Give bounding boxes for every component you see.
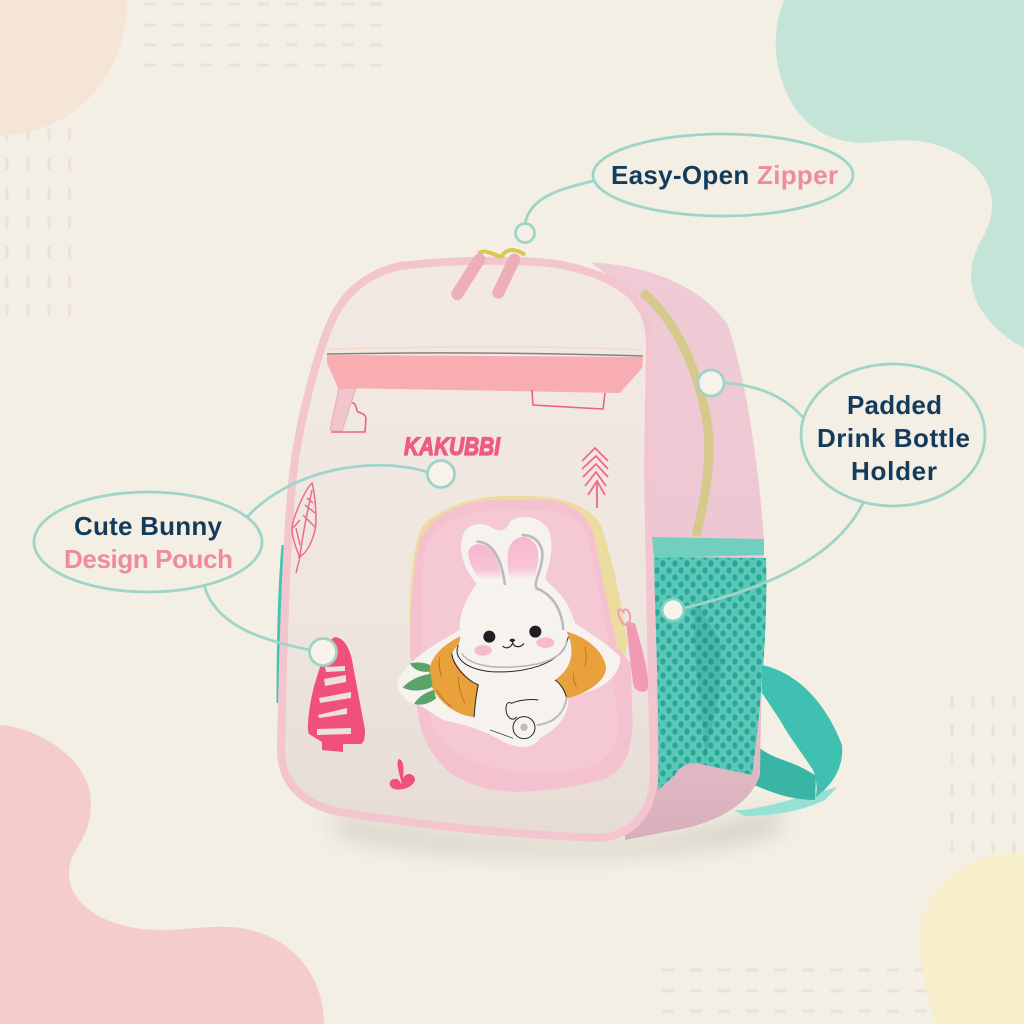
- callout dot: bunny bottom: [310, 638, 336, 666]
- strap: [733, 665, 842, 816]
- blob: yellow bottom-right: [919, 853, 1024, 1024]
- callout: Padded Drink Bottle Holder: [801, 364, 985, 506]
- logo: KAKUBBI: [404, 433, 501, 461]
- mesh pocket: [652, 537, 766, 790]
- decorative dashes: left: [7, 129, 70, 316]
- backpack: [278, 250, 842, 853]
- front panel: [281, 261, 654, 838]
- callout: Padded Drink Bottle Holder: Holder: [851, 456, 937, 486]
- pouch zipper trim: [409, 496, 627, 663]
- splash print: [390, 759, 415, 790]
- leaf print: [292, 483, 316, 573]
- pink pocket flap: [327, 355, 643, 393]
- pocket zip pull: [330, 388, 356, 431]
- carrot print: [308, 637, 365, 752]
- cloud print: [331, 402, 366, 432]
- top flap seam: [328, 347, 642, 350]
- callout: Cute Bunny Design Pouch: Design Pouch: [64, 544, 233, 574]
- callout: Cute Bunny Design Pouch: Cute Bunny: [74, 511, 223, 541]
- callout: Easy-Open Zipper: Easy-Open Zipper: [611, 160, 838, 190]
- side zipper: [642, 292, 709, 536]
- callout: Cute Bunny Design Pouch: [34, 492, 262, 592]
- side panel: [590, 262, 764, 840]
- bunny sticker: [397, 517, 620, 747]
- blob: peach top-left: [0, 0, 127, 135]
- blob: mint top-right: [776, 0, 1024, 348]
- zipper pull: [618, 609, 630, 625]
- callout dot: zipper: [516, 224, 534, 242]
- front pouch: [397, 496, 648, 792]
- decorative dashes: bottom: [662, 970, 930, 1011]
- callout dot: bottle mesh: [662, 599, 684, 621]
- face: [483, 631, 495, 643]
- callout dot: bunny top: [428, 460, 454, 488]
- callout dot: bottle top: [698, 370, 724, 396]
- pocket outline print: [532, 390, 605, 409]
- callout: Padded Drink Bottle Holder: Padded: [847, 390, 942, 420]
- ears: [468, 544, 502, 580]
- pouch body: [410, 500, 633, 792]
- left mesh sliver: [278, 545, 287, 703]
- foot and tail: [506, 700, 538, 719]
- decorative dashes: right: [952, 695, 1014, 853]
- carrot leaves: [403, 663, 436, 705]
- callout: Easy-Open Zipper: [593, 134, 853, 216]
- ground shadow: [330, 812, 780, 853]
- neck line: [457, 637, 568, 672]
- callout lines: [204, 180, 863, 650]
- callout: Padded Drink Bottle Holder: Drink Bottle: [817, 423, 970, 453]
- blob: pink bottom-left: [0, 725, 324, 1024]
- carrot: [429, 637, 478, 717]
- tree print: [582, 448, 608, 508]
- top zipper pulls: [457, 250, 525, 294]
- decorative dashes: top: [144, 4, 382, 65]
